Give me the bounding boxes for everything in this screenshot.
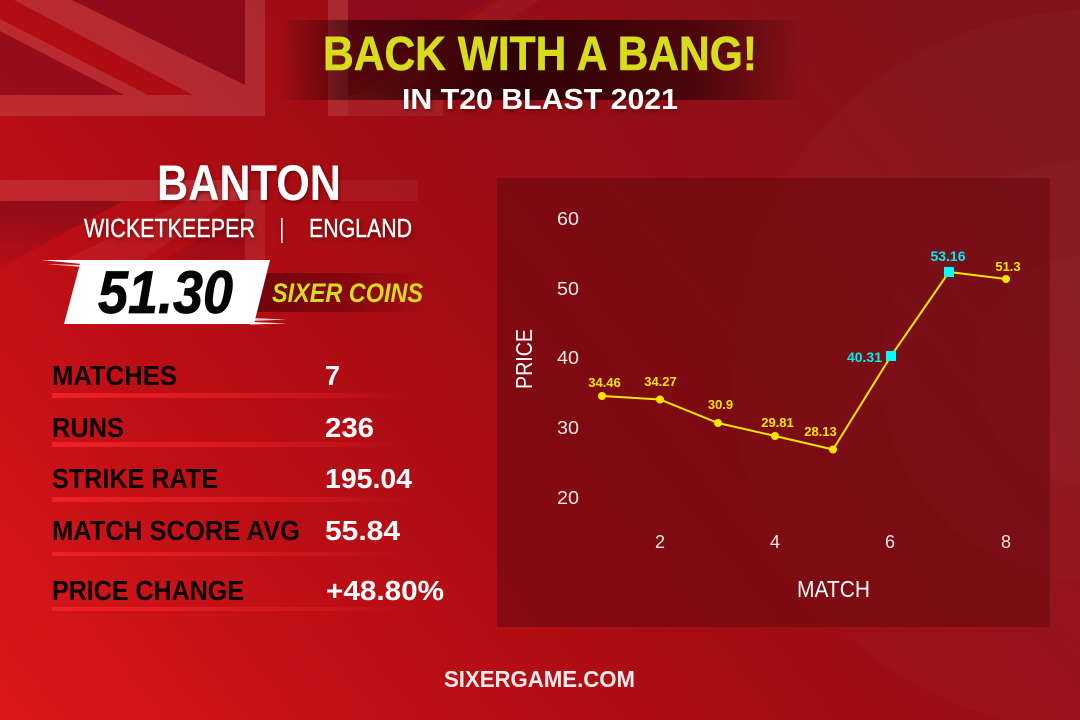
data labels: 28.13	[804, 424, 837, 439]
stat: matches	[52, 360, 412, 398]
stat: strike rate	[52, 463, 412, 502]
player role and country: ENGLAND	[309, 213, 412, 243]
stat: strike rate: STRIKE RATE	[52, 463, 218, 494]
highlighted points	[886, 267, 954, 361]
y axis title: PRICE	[511, 329, 537, 389]
stat: price change	[52, 575, 444, 611]
highlighted labels: 53.16	[930, 248, 966, 264]
coin value: 51.30	[98, 259, 233, 326]
data points	[598, 275, 1010, 454]
stat: runs	[52, 412, 412, 447]
player role and country: WICKETKEEPER	[84, 213, 255, 243]
highlighted labels	[847, 248, 966, 365]
x axis ticks: 6	[885, 532, 895, 552]
data labels: 30.9	[708, 397, 733, 412]
coin badge	[41, 259, 427, 326]
data labels: 34.27	[644, 374, 677, 389]
player role and country	[84, 213, 412, 243]
data labels: 29.81	[761, 415, 794, 430]
y axis ticks: 20	[557, 488, 579, 508]
x axis ticks: 8	[1001, 532, 1011, 552]
x axis ticks: 2	[655, 532, 665, 552]
subtitle: IN T20 BLAST 2021	[402, 84, 678, 116]
stat: price change: PRICE CHANGE	[52, 575, 244, 606]
stat: match score avg: 55.84	[325, 515, 400, 546]
data labels: 34.46	[588, 375, 621, 390]
title band	[280, 20, 805, 100]
data labels: 51.3	[995, 259, 1021, 274]
highlighted labels: 40.31	[847, 349, 882, 365]
stat: matches: 7	[325, 360, 340, 391]
stat: runs: 236	[325, 412, 374, 443]
stat: matches: MATCHES	[52, 360, 177, 391]
panel: price chart	[497, 178, 1050, 627]
title: BACK WITH A BANG!	[323, 28, 757, 81]
y axis ticks: 30	[557, 418, 579, 438]
footer url: SIXERGAME.COM	[444, 666, 635, 692]
stat: runs: RUNS	[52, 412, 124, 443]
x axis title: MATCH	[797, 576, 870, 602]
union jack flag backdrop	[0, 0, 540, 268]
y axis ticks: 60	[557, 209, 579, 229]
stat: match score avg	[52, 515, 412, 556]
y axis ticks: 50	[557, 279, 579, 299]
player name: BANTON	[157, 155, 341, 211]
price line	[602, 272, 1006, 450]
stat: price change: +48.80%	[326, 575, 444, 606]
x axis ticks: 4	[770, 532, 780, 552]
stat: strike rate: 195.04	[325, 463, 412, 494]
data labels	[588, 259, 1021, 439]
y axis ticks: 40	[557, 348, 579, 368]
coin label: SIXER COINS	[272, 278, 423, 308]
stat: match score avg: MATCH SCORE AVG	[52, 515, 300, 546]
y axis ticks	[557, 209, 579, 508]
x axis ticks	[655, 532, 1011, 552]
